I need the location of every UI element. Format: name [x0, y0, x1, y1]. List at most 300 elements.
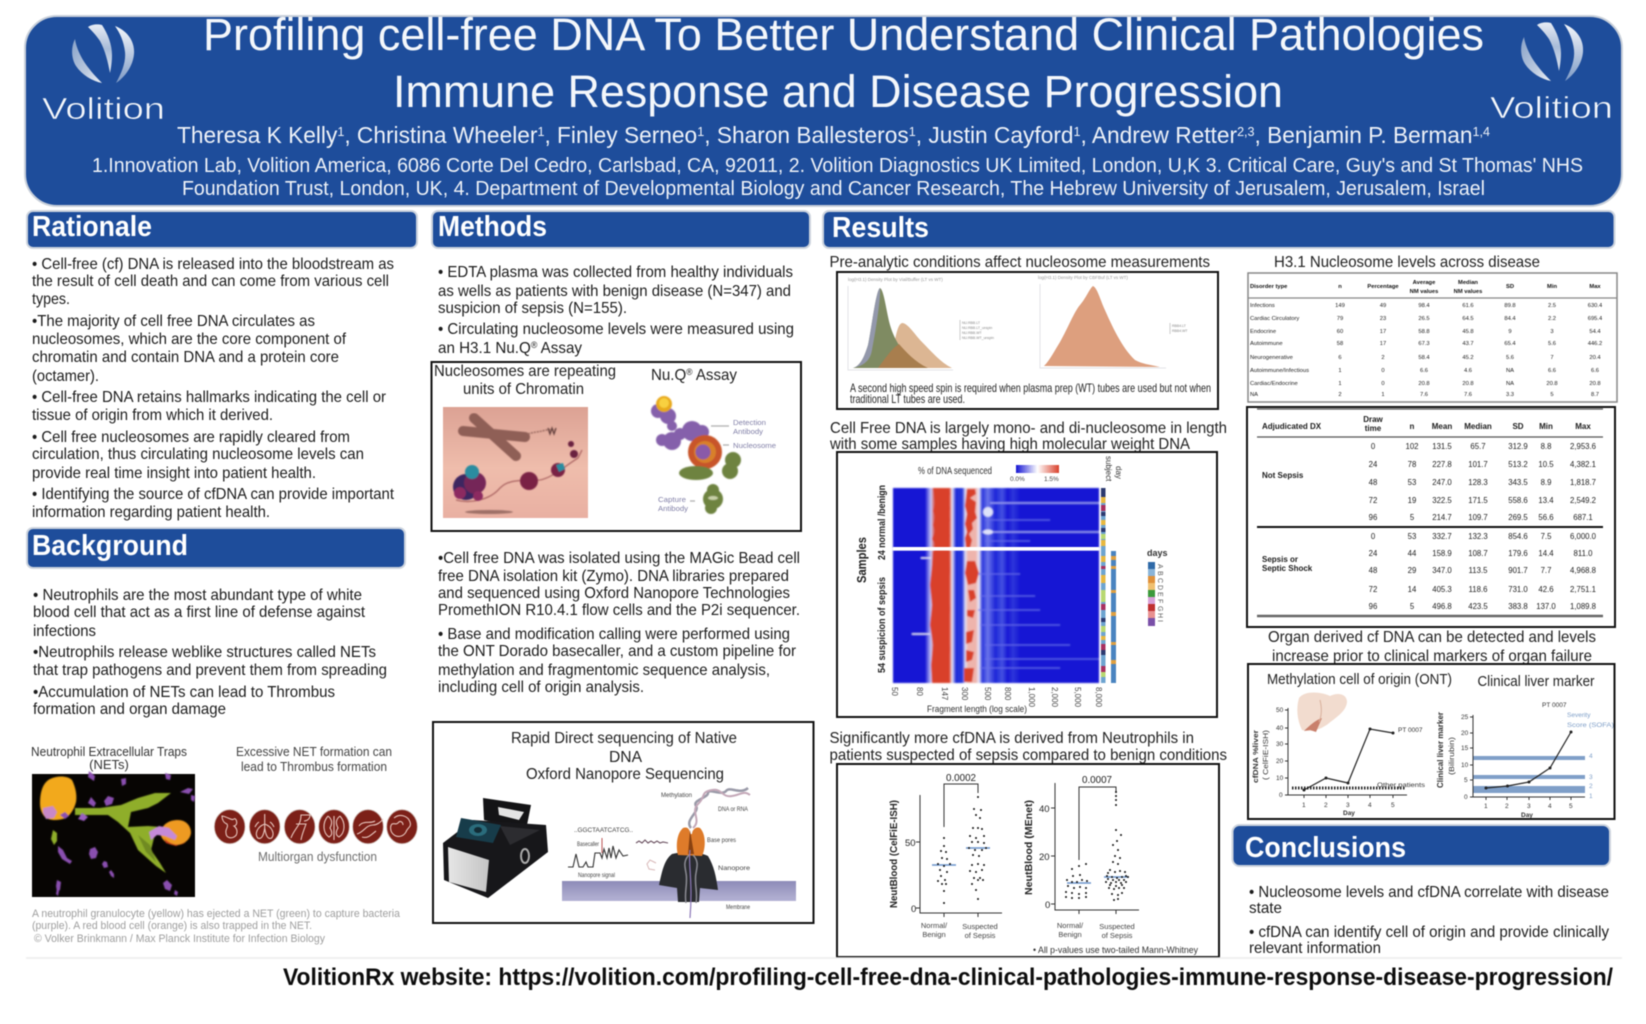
title: Profiling cell-free DNA To Better Understand Clinical Pathologies	[203, 9, 1484, 60]
text block: rationale bullets: • Cell-free DNA retains hallmarks indicating the cell or	[32, 389, 386, 406]
heading: cfDNA length: Cell Free DNA is largely mono- and di-nucleosome in length	[830, 420, 1227, 437]
table: disorder types: Max	[1589, 284, 1601, 290]
legend: days: A	[1156, 564, 1163, 569]
heading: organ derived cfDNA	[1268, 629, 1596, 665]
heading: conclusions: Conclusions	[1245, 832, 1406, 864]
logo: Volition left: Volition	[42, 91, 165, 126]
table: adjudicated diagnosis: 24	[1369, 460, 1378, 469]
table: adjudicated diagnosis: 1,818.7	[1570, 478, 1596, 487]
chart: clinical liver marker: 25	[1461, 714, 1469, 721]
chart: clinical liver marker: 5	[1464, 777, 1468, 784]
table: adjudicated diagnosis: 44	[1408, 549, 1417, 558]
table: disorder types: 20.8	[1462, 381, 1474, 387]
chart: density left: log(H3.1) Density Plot by Vial/Buffer (LT vs WT)	[848, 277, 943, 282]
table: disorder types: 2.5	[1548, 303, 1556, 309]
text block: methods part 1: • Circulating nucleosome levels were measured using	[438, 321, 794, 338]
authors: , Andrew Retter	[1081, 122, 1237, 148]
table: adjudicated diagnosis: 10.5	[1538, 460, 1554, 469]
axis: fragment length ticks	[890, 687, 1103, 708]
chart: cfDNA liver fraction: 1	[1302, 802, 1306, 809]
caption: image credit: A neutrophil granulocyte (yellow) has ejected a NET (green) to capture bacteria	[32, 908, 401, 920]
text block: rationale bullets: the result of cell death and can come from various cell	[32, 273, 389, 290]
authors: 1	[1074, 124, 1081, 139]
table: adjudicated diagnosis: 102	[1405, 442, 1419, 451]
chart: clinical liver marker: PT 0007	[1542, 702, 1567, 709]
heading: pre-analytic: Pre-analytic conditions affect nucleosome measurements	[830, 254, 1210, 271]
label: thrombus heading	[236, 744, 392, 774]
text block: rationale bullets: provide real time insight into patient health.	[32, 465, 316, 482]
table: adjudicated diagnosis: 48	[1369, 566, 1377, 575]
text block: rationale bullets: types.	[32, 291, 70, 308]
chart: MEnet scatter: 20	[1039, 852, 1050, 863]
chart: cfDNA liver fraction: Other patients	[1377, 782, 1426, 789]
text block: rationale bullets: • Cell-free (cf) DNA is released into the bloodstream as	[32, 256, 394, 273]
table: disorder types: 17	[1380, 329, 1386, 335]
table: disorder types: Neurogenerative	[1250, 355, 1293, 361]
table: adjudicated diagnosis: 5	[1410, 602, 1415, 611]
table: adjudicated diagnosis: 4,968.8	[1570, 566, 1596, 575]
image: chromatin illustration	[443, 407, 588, 518]
caption: image credit: © Volker Brinkmann / Max Planck Institute for Infection Biology	[34, 933, 325, 945]
heading: organ derived cfDNA: increase prior to clinical markers of organ failure	[1272, 648, 1592, 665]
text block: rationale bullets: chromatin and contain DNA and a protein core	[32, 349, 339, 366]
chart title: clinical: Clinical liver marker	[1478, 674, 1595, 690]
table: adjudicated diagnosis: 72	[1369, 496, 1377, 505]
table: disorder types: 0	[1381, 381, 1385, 387]
chart: cfDNA liver fraction: 4	[1368, 802, 1372, 809]
table: adjudicated diagnosis: Median	[1464, 422, 1492, 431]
table: adjudicated diagnosis: 108.7	[1468, 549, 1488, 558]
authors: 2,3	[1237, 124, 1255, 139]
title: Immune Response and Disease Progression	[393, 66, 1283, 117]
table: disorder types: Infections	[1250, 303, 1275, 309]
chart: MEnet scatter: 0	[1045, 900, 1050, 911]
heading: H3.1 levels: H3.1 Nucleosome levels across disease	[1274, 254, 1540, 271]
chart: cfDNA liver fraction: 30	[1276, 741, 1284, 748]
table: disorder types: 1	[1338, 381, 1342, 387]
axis: fragment length ticks: 8,000	[1094, 687, 1103, 708]
table: adjudicated diagnosis: 137.0	[1536, 602, 1556, 611]
heading: neutrophils	[830, 730, 1227, 764]
axis: fragment length ticks: 147	[940, 687, 949, 701]
table: disorder types: 6.6	[1591, 368, 1599, 374]
text block: conclusions bullets	[1249, 884, 1609, 957]
table: disorder types: NM values	[1454, 289, 1482, 295]
authors: , Justin Cayford	[916, 122, 1074, 148]
text block: rationale bullets: nucleosomes, which are the core component of	[32, 331, 347, 348]
table: disorder types: NA	[1506, 381, 1514, 387]
chart: cfDNA liver fraction: Day	[1343, 810, 1355, 817]
table: adjudicated diagnosis: 5	[1410, 513, 1415, 522]
chart: CelFiE-ISH scatter: Suspected	[962, 922, 998, 931]
logo: Volition right	[1490, 22, 1613, 125]
table: disorder types: 98.4	[1418, 303, 1430, 309]
table: disorder types	[1248, 273, 1617, 402]
table: adjudicated diagnosis: 101.7	[1468, 460, 1488, 469]
table: disorder types: 2	[1338, 392, 1342, 398]
chart: clinical liver marker: 3	[1589, 774, 1593, 781]
text block: methods part 1	[438, 264, 794, 357]
table: disorder types: 49	[1380, 303, 1386, 309]
legend: days: H	[1156, 613, 1163, 618]
image: neutrophil extracellular trap micrograph	[32, 771, 195, 897]
table: disorder types: 84.4	[1504, 316, 1516, 322]
table: adjudicated diagnosis: 558.6	[1508, 496, 1528, 505]
table: disorder types: 43.7	[1462, 341, 1474, 347]
table: disorder types: 5.6	[1506, 355, 1514, 361]
chart: MEnet scatter: Normal/	[1057, 921, 1084, 930]
axis labels: samples	[854, 485, 888, 673]
chart: clinical liver marker: Day	[1521, 812, 1533, 819]
heading: cfDNA length: with some samples having high molecular weight DNA	[829, 436, 1190, 453]
caption: spin note: A second high speed spin is required when plasma prep (WT) tubes are used but not when	[850, 381, 1211, 395]
table: adjudicated diagnosis: 113.5	[1469, 566, 1488, 575]
axis title: Fragment length (log scale)	[927, 704, 1027, 714]
legend: days: B	[1156, 571, 1163, 576]
chart: cfDNA liver fraction: 10	[1276, 775, 1284, 782]
table: disorder types: 17	[1380, 341, 1386, 347]
label: nucleosomes	[434, 363, 616, 398]
table: disorder types: SD	[1506, 284, 1514, 290]
chart: clinical liver marker: 4	[1589, 753, 1593, 760]
annotation strips: day	[1114, 466, 1123, 479]
figure: nanopore sequencing	[433, 722, 814, 923]
table: disorder types: 20.8	[1418, 381, 1430, 387]
chart: clinical liver marker: 1	[1589, 793, 1593, 800]
heading: methods	[432, 211, 810, 248]
chart: density right: RBB4.LT	[1172, 324, 1187, 328]
text block: background bullets: • Neutrophils are the most abundant type of white	[33, 587, 362, 604]
table: adjudicated diagnosis: 53	[1408, 478, 1416, 487]
table: adjudicated diagnosis	[1247, 407, 1615, 627]
table: adjudicated diagnosis: 13.4	[1538, 496, 1554, 505]
chart: clinical liver marker: 20	[1461, 730, 1469, 737]
axis: fragment length ticks: 300	[960, 687, 969, 701]
caption: spin note	[850, 381, 1211, 406]
table: adjudicated diagnosis: 1,089.8	[1570, 602, 1596, 611]
chart: CelFiE-ISH scatter: NeutBlood (CelFiE-ISH)	[889, 800, 900, 908]
table: disorder types: 5.6	[1548, 341, 1556, 347]
panel: conclusions	[1232, 825, 1610, 957]
table: disorder types: Cardiac/Endocrine	[1250, 381, 1298, 387]
table: adjudicated diagnosis: 158.9	[1432, 549, 1452, 558]
chart: MEnet scatter: 40	[1039, 804, 1050, 815]
text block: background bullets: •Accumulation of NETs can lead to Thrombus	[33, 684, 335, 701]
chart: MEnet scatter: Benign	[1058, 930, 1082, 939]
chart: cfDNA liver fraction: 0	[1279, 792, 1283, 799]
heatmap	[893, 488, 1099, 683]
chart: cfDNA liver fraction: PT 0007	[1398, 727, 1423, 734]
table: disorder types: Min	[1547, 284, 1557, 290]
figure title: Rapid Direct sequencing of Native	[511, 730, 737, 747]
table: disorder types: 6.6	[1548, 368, 1556, 374]
label: NETs image heading: (NETs)	[89, 757, 129, 772]
table: adjudicated diagnosis: 214.7	[1432, 513, 1452, 522]
table: adjudicated diagnosis: 269.5	[1508, 513, 1528, 522]
authors: 1	[337, 124, 344, 139]
table: disorder types: 9	[1508, 329, 1512, 335]
table: adjudicated diagnosis: Septic Shock	[1262, 564, 1313, 573]
table: disorder types: Median	[1458, 280, 1478, 286]
table: adjudicated diagnosis: 312.9	[1508, 442, 1528, 451]
table: adjudicated diagnosis: Max	[1575, 422, 1591, 431]
chart: clinical liver marker: Severity	[1567, 712, 1591, 719]
table: disorder types: 1	[1338, 368, 1342, 374]
figure title	[511, 730, 737, 783]
table: adjudicated diagnosis: Min	[1539, 422, 1553, 431]
text block: methods part 2: PromethION R10.4.1 flow cells and the P2i sequencer.	[438, 602, 800, 619]
table: disorder types: 3.3	[1506, 392, 1514, 398]
table: disorder types: 54.4	[1589, 329, 1601, 335]
text block: rationale bullets	[32, 256, 395, 521]
heading: rationale	[27, 211, 417, 248]
figure: liver charts	[1248, 664, 1614, 819]
axis labels: samples: 24 normal /benign	[877, 485, 888, 560]
legend: days: D	[1156, 585, 1163, 590]
text block: methods part 1: ®	[531, 340, 538, 350]
table: adjudicated diagnosis: 7.7	[1541, 566, 1551, 575]
table: disorder types: 64.5	[1462, 316, 1474, 322]
text block: methods part 2: including cell of origin analysis.	[438, 679, 644, 696]
chart: clinical liver marker: (Bilirubin)	[1447, 736, 1456, 775]
table: disorder types: 20.8	[1589, 381, 1601, 387]
heading: neutrophils: Significantly more cfDNA is derived from Neutrophils in	[830, 730, 1194, 747]
table: adjudicated diagnosis: 118.6	[1469, 585, 1487, 594]
chart: cfDNA liver fraction: ( CelFiE-ISH)	[1261, 729, 1270, 780]
image: Nu.Q antibody illustration: Nucleosome	[733, 441, 776, 450]
text block: methods part 2: methylation and fragmentomic sequence analysis,	[438, 662, 770, 679]
chart: clinical liver marker: Clinical liver marker	[1436, 712, 1445, 788]
chart title: methylation: Methylation cell of origin (ONT)	[1267, 672, 1452, 688]
table: adjudicated diagnosis: 0	[1371, 442, 1376, 451]
table: disorder types: NA	[1250, 392, 1258, 398]
legend: days: E	[1156, 592, 1163, 597]
axis: fragment length ticks: 2,000	[1050, 687, 1059, 708]
diagram: nanopore and signal: Nanopore	[718, 866, 751, 872]
figure: neutrophil scatter plots	[837, 764, 1219, 957]
figure: density plots	[837, 272, 1218, 409]
annotation strips	[1101, 456, 1123, 683]
text block: background bullets: formation and organ damage	[33, 701, 226, 718]
table: adjudicated diagnosis: 854.6	[1508, 532, 1528, 541]
authors: , Sharon Ballesteros	[704, 122, 909, 148]
label: thrombus heading: Excessive NET formation can	[236, 744, 392, 759]
icon: liver	[1297, 692, 1347, 732]
legend: colour scale: 1.5%	[1044, 476, 1059, 483]
table: disorder types: 7.6	[1464, 392, 1472, 398]
table: disorder types: 58.8	[1418, 329, 1430, 335]
text block: rationale bullets: information regarding patient health.	[32, 504, 270, 521]
table: adjudicated diagnosis: 48	[1369, 478, 1377, 487]
logo: Volition right: Volition	[1490, 90, 1613, 125]
table: adjudicated diagnosis: 42.6	[1538, 585, 1554, 594]
table: adjudicated diagnosis: 19	[1408, 496, 1416, 505]
caption: spin note: traditional LT tubes are used.	[850, 392, 965, 406]
image: Nu.Q antibody illustration: Antibody	[733, 427, 763, 436]
table: adjudicated diagnosis: time	[1365, 424, 1382, 433]
chart: clinical liver marker: 0	[1464, 794, 1468, 801]
table: adjudicated diagnosis: 109.7	[1468, 513, 1488, 522]
text block: background bullets: blood cell that act as a first line of defense against	[33, 604, 366, 621]
image: Nu.Q antibody illustration	[651, 396, 776, 514]
table: adjudicated diagnosis: 132.3	[1468, 532, 1488, 541]
table: adjudicated diagnosis: 14	[1408, 585, 1417, 594]
table: adjudicated diagnosis: Adjudicated DX	[1262, 422, 1322, 431]
table: adjudicated diagnosis: 423.5	[1468, 602, 1488, 611]
label: NETs image heading	[31, 744, 187, 772]
legend: days: F	[1156, 599, 1163, 603]
table: disorder types: 0	[1381, 368, 1385, 374]
table: disorder types: NA	[1506, 368, 1514, 374]
table: disorder types: 5	[1550, 392, 1554, 398]
table: disorder types: NM values	[1410, 289, 1438, 295]
table: disorder types: Autoimmune	[1250, 341, 1283, 347]
table: adjudicated diagnosis: SD	[1512, 422, 1524, 431]
table: disorder types: 58.4	[1418, 355, 1430, 361]
figure: fragment length heatmap	[837, 452, 1217, 717]
table: adjudicated diagnosis: 8.9	[1541, 478, 1551, 487]
table: disorder types: Endocrine	[1250, 329, 1276, 335]
table: adjudicated diagnosis: 56.6	[1538, 513, 1554, 522]
chart: density right: log(H3.1) Density Plot by CBFBuf (LT vs WT)	[1038, 275, 1128, 280]
text block: methods part 2: the ONT Dorado basecaller, and a custom pipeline for	[438, 643, 796, 660]
chart: density left: NU.RBB.WT	[962, 331, 982, 335]
heading: neutrophils: patients suspected of sepsis compared to benign conditions	[830, 747, 1227, 764]
text block: methods part 2: • Base and modification calling were performed using	[438, 626, 790, 643]
table: adjudicated diagnosis: 513.2	[1508, 460, 1528, 469]
diagram: nanopore and signal: Basecaller	[577, 842, 599, 848]
table: disorder types: 2	[1381, 355, 1385, 361]
table: disorder types: Average	[1413, 280, 1436, 286]
table: adjudicated diagnosis: 2,953.6	[1570, 442, 1596, 451]
affiliations: Foundation Trust, London, UK, 4. Department of Developmental Biology and Cancer Research, The Hebrew University of Jerusalem, Jerusalem, Israel	[182, 178, 1485, 200]
image: Nu.Q antibody illustration: Detection	[733, 418, 766, 427]
table: adjudicated diagnosis: 96	[1369, 513, 1377, 522]
table: adjudicated diagnosis: 65.7	[1470, 442, 1486, 451]
text block: methods part 2: •Cell free DNA was isolated using the MAGic Bead cell	[438, 550, 800, 567]
text block: rationale bullets: •The majority of cell free DNA circulates as	[32, 313, 315, 330]
text block: methods part 1: Assay	[537, 340, 582, 357]
chart: density left	[848, 277, 994, 370]
label: Nu.Q assay: Nu.Q	[651, 367, 688, 384]
table: disorder types: Autoimmune/Infectious	[1250, 368, 1309, 374]
chart: density right: RBB4.WT	[1172, 329, 1188, 333]
heading: background: Background	[32, 530, 188, 562]
chart: clinical liver marker	[1436, 702, 1614, 819]
table: disorder types: 7	[1550, 355, 1554, 361]
table: adjudicated diagnosis: 2,751.1	[1570, 585, 1596, 594]
icons: multiorgan dysfunction circles	[214, 810, 417, 844]
chart: cfDNA liver fraction: cfDNA %liver	[1251, 730, 1260, 783]
diagram: nanopore and signal: ..GGCTAATCATCG..	[574, 828, 633, 834]
chart: cfDNA liver fraction: 5	[1391, 802, 1395, 809]
figure: nucleosome and Nu.Q assay	[432, 362, 801, 531]
diagram: nanopore and signal: Methylation	[661, 793, 692, 799]
chart: cfDNA liver fraction: 50	[1276, 707, 1284, 714]
label: multiorgan dysfunction: Multiorgan dysfunction	[258, 849, 377, 864]
table: adjudicated diagnosis: n	[1410, 422, 1415, 431]
diagram: nanopore and signal	[562, 788, 796, 918]
legend: colour scale: % of DNA sequenced	[918, 466, 992, 477]
table: disorder types: 7.6	[1420, 392, 1428, 398]
table: adjudicated diagnosis: 78	[1408, 460, 1416, 469]
table: disorder types: Disorder type	[1250, 284, 1288, 290]
table: adjudicated diagnosis: Mean	[1432, 422, 1452, 431]
table: disorder types: 20.4	[1589, 355, 1601, 361]
caption: image credit	[32, 908, 401, 945]
figure title: DNA	[609, 749, 642, 766]
table: adjudicated diagnosis: 687.1	[1573, 513, 1593, 522]
table: adjudicated diagnosis: 731.0	[1508, 585, 1528, 594]
icon: sequencer device	[443, 798, 548, 898]
axis: fragment length ticks: 5,000	[1073, 687, 1082, 708]
affiliations	[92, 155, 1583, 200]
axis: fragment length ticks: 1,000	[1027, 687, 1036, 708]
panel: methods	[432, 211, 814, 923]
diagram: nanopore and signal: DNA or RNA	[718, 807, 748, 813]
table: disorder types: 60	[1337, 329, 1343, 335]
table: adjudicated diagnosis: 405.3	[1432, 585, 1452, 594]
heading: methods: Methods	[438, 211, 547, 243]
table: adjudicated diagnosis: 96	[1369, 602, 1377, 611]
text block: background bullets: that trap pathogens and prevent them from spreading	[33, 662, 387, 679]
chart: MEnet scatter	[1024, 774, 1139, 940]
table: adjudicated diagnosis: 6,000.0	[1570, 532, 1597, 541]
chart: cfDNA liver fraction: 20	[1276, 758, 1284, 765]
diagram: nanopore and signal: Base pores	[707, 838, 736, 844]
table: adjudicated diagnosis: Draw	[1363, 415, 1384, 424]
table: disorder types: 630.4	[1588, 303, 1603, 309]
chart: density right	[1038, 275, 1188, 368]
caption: image credit: (purple). A red blood cell (orange) is also trapped in the NET.	[32, 920, 312, 932]
chart: clinical liver marker: 5	[1569, 803, 1573, 810]
text block: methods part 1: an H3.1 Nu.Q	[438, 340, 533, 357]
table: disorder types: 6	[1338, 355, 1342, 361]
axis labels: samples: Samples	[854, 537, 869, 583]
table: adjudicated diagnosis: Sepsis or	[1262, 555, 1298, 564]
figure title: Oxford Nanopore Sequencing	[526, 766, 724, 783]
panel: background	[27, 528, 417, 945]
table: disorder types: 23	[1380, 316, 1386, 322]
table: adjudicated diagnosis: 227.8	[1432, 460, 1452, 469]
chart: CelFiE-ISH scatter: 50	[905, 838, 916, 849]
diagram: nanopore and signal: Membrane	[726, 905, 751, 911]
authors: Theresa K Kelly	[177, 122, 343, 148]
chart: clinical liver marker: Score (SOFA)	[1567, 722, 1614, 729]
text block: background bullets: infections	[33, 623, 96, 640]
heading: cfDNA length	[829, 420, 1227, 453]
table: disorder types: 695.4	[1588, 316, 1603, 322]
table: disorder types: 8.7	[1591, 392, 1599, 398]
chart: density left: NU.RBB.LT	[962, 321, 981, 325]
image: Nu.Q antibody illustration: Antibody	[658, 504, 688, 513]
label: nucleosomes: Nucleosomes are repeating	[434, 363, 616, 380]
axis: fragment length ticks: 800	[1003, 687, 1012, 701]
chart: CelFiE-ISH scatter: of Sepsis	[965, 931, 996, 940]
table: adjudicated diagnosis: 322.5	[1432, 496, 1452, 505]
legend: colour scale: 0.0%	[1010, 476, 1025, 483]
table: adjudicated diagnosis: 343.5	[1508, 478, 1528, 487]
table: adjudicated diagnosis: 901.7	[1508, 566, 1528, 575]
label: nucleosomes: units of Chromatin	[463, 381, 584, 398]
chart: CelFiE-ISH scatter: 0	[911, 904, 916, 915]
table: adjudicated diagnosis: Not Sepsis	[1262, 471, 1304, 480]
chart: CelFiE-ISH scatter: 0.0002	[946, 772, 976, 784]
table: adjudicated diagnosis: 8.8	[1541, 442, 1551, 451]
chart: clinical liver marker: 10	[1461, 762, 1469, 769]
table: adjudicated diagnosis: 0	[1371, 532, 1376, 541]
diagram: nanopore and signal: Nanopore signal	[578, 873, 615, 879]
